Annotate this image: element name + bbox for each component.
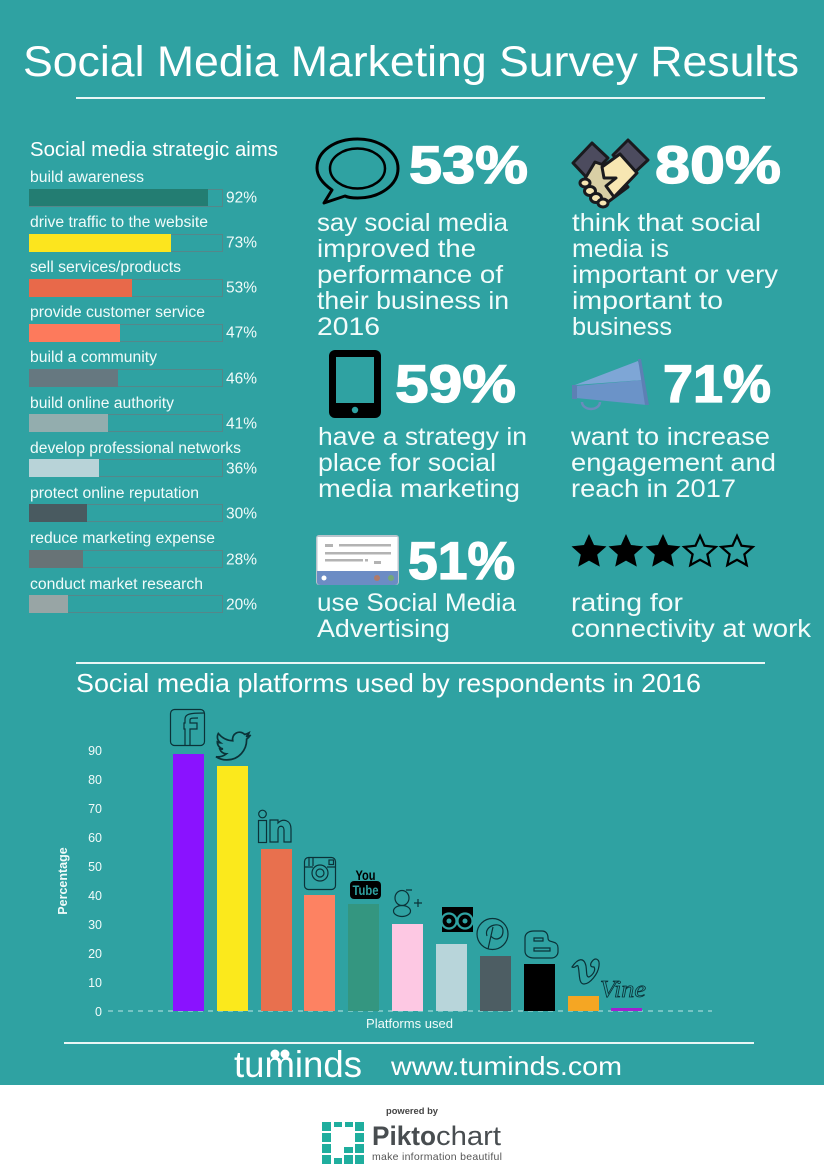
text: strategy: have a strategy in <box>318 423 527 451</box>
bars <box>173 754 642 1011</box>
bar row: customer service <box>29 304 257 342</box>
panel: social media strategic aims <box>29 139 278 614</box>
bar row: build a community <box>29 349 257 388</box>
bar row: professional networks <box>29 440 257 478</box>
text: importance: business <box>572 313 672 341</box>
text: performance: their business in <box>317 287 509 315</box>
icon: pinterest <box>477 918 508 950</box>
icon: star rating <box>572 534 753 567</box>
bar row: drive traffic: 73% <box>226 234 257 252</box>
number: 53%: 53% <box>409 136 528 195</box>
tagline: make information beautiful <box>372 1151 502 1163</box>
icon: tablet <box>329 350 381 418</box>
stat: connectivity rating <box>571 534 812 643</box>
stat: 53% performance <box>317 136 528 341</box>
icon: google plus <box>394 890 422 916</box>
wordmark: Pikto <box>372 1121 436 1151</box>
icon: vine: Vine <box>600 977 646 1003</box>
text: performance: say social media <box>317 209 508 237</box>
number: 80%: 80% <box>655 136 781 195</box>
text: connectivity <box>571 589 812 643</box>
bar row: online authority <box>29 395 257 432</box>
text: importance: think that social <box>572 209 761 237</box>
bar row: professional networks: develop professional networks <box>30 440 241 457</box>
bar row: build awareness: 92% <box>226 190 257 206</box>
bar row: market research <box>29 576 257 614</box>
stat: 51% advertising <box>316 532 516 643</box>
y axis title: Percentage <box>56 847 70 915</box>
text: powered by: powered by <box>386 1106 439 1117</box>
wordmark <box>372 1121 502 1151</box>
y axis labels: 30 <box>88 918 102 932</box>
text: performance: performance of <box>317 261 503 289</box>
stat: 59% strategy <box>318 350 527 503</box>
text: advertising: Advertising <box>317 615 450 643</box>
text: engagement: reach in 2017 <box>571 475 736 503</box>
icon: tripadvisor <box>442 907 473 932</box>
bar row: online reputation: protect online reputation <box>30 485 199 502</box>
bar row: market research: conduct market research <box>30 576 203 593</box>
website url: www.tuminds.com <box>390 1051 622 1081</box>
bar row: drive traffic <box>29 214 257 252</box>
bar row: online authority: 41% <box>226 416 257 432</box>
icon: blogger <box>525 931 558 958</box>
bar row: online reputation: 30% <box>226 506 257 522</box>
text: advertising <box>317 589 516 643</box>
y axis labels: 90 <box>88 744 102 758</box>
y axis labels: 0 <box>95 1005 102 1019</box>
text: importance: important or very <box>572 261 779 289</box>
logo mark <box>322 1122 364 1164</box>
icon: megaphone <box>572 359 649 409</box>
y axis labels <box>88 744 102 1019</box>
stat: 71% engagement <box>570 355 776 503</box>
text: strategy: place for social <box>318 449 496 477</box>
icon: facebook <box>170 710 204 746</box>
icon: speech bubble <box>317 139 398 203</box>
y axis labels: 40 <box>88 889 102 903</box>
y axis labels: 60 <box>88 831 102 845</box>
bar row: marketing expense <box>29 530 257 568</box>
stat: 80% importance <box>572 136 781 341</box>
bar row: sell services: sell services/products <box>30 259 181 276</box>
bar row: build awareness: build awareness <box>30 169 144 186</box>
bar row: sell services: 53% <box>226 280 257 296</box>
number: 71%: 71% <box>663 355 771 414</box>
heading: platforms used: Social media platforms used by respondents in 2016 <box>76 668 701 698</box>
icon: social media ad card <box>316 535 399 585</box>
bar row: market research: 20% <box>226 596 257 614</box>
bar chart: platforms used by respondents <box>56 710 712 1031</box>
text: connectivity: connectivity at work <box>571 615 812 643</box>
bar row: build a community: build a community <box>30 349 157 366</box>
text: performance: improved the <box>317 235 476 263</box>
icon: youtube: You <box>356 867 376 883</box>
title: Social Media Marketing Survey Results <box>23 38 799 86</box>
bar row: professional networks: 36% <box>226 460 257 478</box>
y axis labels: 80 <box>88 773 102 787</box>
icon: handshake <box>573 140 648 207</box>
y axis labels: 70 <box>88 802 102 816</box>
bar row: customer service: 47% <box>226 324 257 342</box>
text: performance: 2016 <box>317 313 380 341</box>
text: importance: media is <box>572 235 669 263</box>
text: connectivity: rating for <box>571 589 683 617</box>
bar row: marketing expense: reduce marketing expense <box>30 530 215 547</box>
bar row: online authority: build online authority <box>30 395 174 412</box>
text: performance <box>317 209 509 341</box>
y axis labels: 20 <box>88 947 102 961</box>
y axis labels: 50 <box>88 860 102 874</box>
text: engagement: want to increase <box>570 423 770 451</box>
bar row: build a community: 46% <box>226 370 257 388</box>
bar row: online reputation <box>29 485 257 522</box>
icon: twitter <box>216 732 250 760</box>
icon: vimeo <box>572 959 599 984</box>
text: engagement: engagement and <box>571 449 776 477</box>
heading: strategic aims: Social media strategic aims <box>30 139 278 161</box>
text: importance: important to <box>572 287 723 315</box>
bar row: marketing expense: 28% <box>226 552 257 568</box>
text: advertising: use Social Media <box>317 589 516 617</box>
bar row: build awareness <box>29 169 257 206</box>
icon: instagram <box>304 858 336 890</box>
text: strategy <box>318 423 527 503</box>
bar row: sell services <box>29 259 257 297</box>
number: 59%: 59% <box>395 355 516 414</box>
wordmark: chart <box>436 1121 502 1151</box>
text: strategy: media marketing <box>318 475 520 503</box>
x axis title: Platforms used <box>366 1017 453 1031</box>
icon: youtube: Tube <box>352 882 379 898</box>
footer: powered by piktochart <box>322 1106 502 1164</box>
bar row: drive traffic: drive traffic to the website <box>30 214 208 231</box>
number: 51%: 51% <box>408 532 515 591</box>
icon: youtube <box>350 867 381 899</box>
y axis labels: 10 <box>88 976 102 990</box>
bar row: customer service: provide customer service <box>30 304 205 321</box>
logo: tuminds: tuminds <box>234 1044 362 1085</box>
icon: linkedin <box>258 810 291 842</box>
text: importance <box>572 209 779 341</box>
text: engagement <box>570 423 776 503</box>
